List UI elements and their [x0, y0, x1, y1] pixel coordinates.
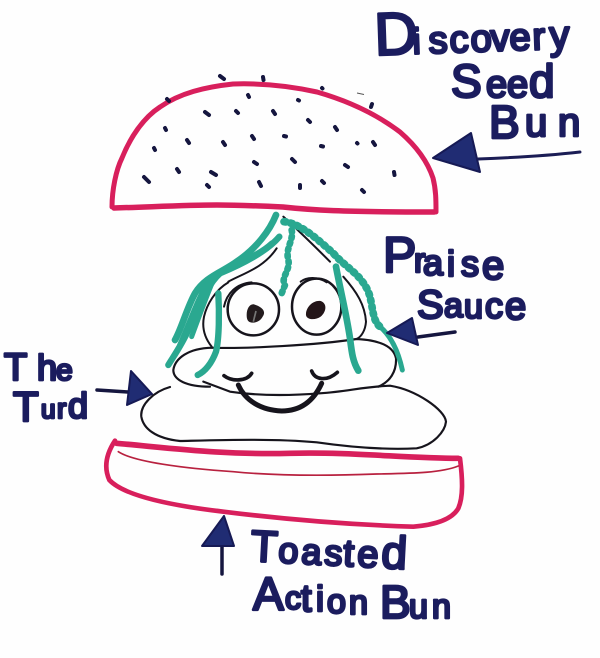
bun seeds	[144, 76, 394, 192]
bottom bun: toasted action bun	[106, 441, 462, 527]
turd outline	[141, 217, 446, 449]
label: Toasted Action Bun: T	[249, 522, 279, 572]
label: Toasted Action Bun: t	[342, 533, 356, 575]
label: Discovery Seed Bun	[373, 0, 580, 148]
label: Discovery Seed Bun: o	[470, 18, 492, 61]
label: Praise Sauce: P	[383, 227, 416, 283]
label: Toasted Action Bun: c	[285, 580, 301, 616]
label: Toasted Action Bun: A	[253, 568, 284, 620]
label: Discovery Seed Bun: i	[412, 21, 421, 62]
label: Discovery Seed Bun: D	[373, 0, 419, 68]
label: The Turd: T	[4, 347, 27, 389]
label: Discovery Seed Bun: v	[490, 17, 510, 60]
label: Discovery Seed Bun: c	[449, 19, 469, 61]
label: Toasted Action Bun: o	[277, 529, 300, 571]
label: Discovery Seed Bun: e	[486, 64, 507, 106]
label: Praise Sauce: i	[447, 243, 455, 284]
right eye	[292, 278, 341, 335]
label: The Turd: h	[37, 347, 57, 388]
label: Praise Sauce: r	[414, 242, 425, 280]
label: Toasted Action Bun: u	[409, 588, 428, 626]
arrow: the turd pointer	[97, 371, 152, 405]
label: Praise Sauce: a	[423, 242, 444, 283]
label: Toasted Action Bun: s	[323, 532, 344, 574]
label: Toasted Action Bun: n	[432, 588, 451, 626]
label: Toasted Action Bun	[249, 519, 451, 628]
label: Discovery Seed Bun: S	[451, 55, 482, 107]
label: Discovery Seed Bun: d	[529, 55, 555, 107]
label: The Turd: r	[57, 393, 66, 424]
label: Discovery Seed Bun: u	[525, 101, 547, 145]
label: Discovery Seed Bun: y	[549, 13, 570, 58]
label: The Turd	[4, 347, 88, 430]
label: Discovery Seed Bun: r	[532, 16, 546, 59]
arrow: praise sauce pointer	[387, 318, 455, 345]
label: Praise Sauce: S	[417, 283, 444, 327]
label: The Turd: T	[13, 383, 39, 430]
arrow: discovery seed bun pointer	[433, 133, 580, 172]
label: Praise Sauce: s	[461, 243, 479, 284]
smile	[224, 371, 337, 411]
label: Discovery Seed Bun: B	[489, 96, 520, 148]
arrow: toasted action bun pointer	[202, 516, 234, 574]
hair: green praise sauce	[168, 215, 402, 375]
label: Praise Sauce	[383, 227, 526, 328]
label: Toasted Action Bun: B	[380, 576, 411, 628]
label: Toasted Action Bun: t	[301, 578, 312, 620]
label: Praise Sauce: a	[444, 287, 463, 325]
label: The Turd: d	[68, 385, 88, 426]
label: Toasted Action Bun: i	[316, 578, 324, 619]
label: Toasted Action Bun: a	[300, 531, 324, 573]
label: Discovery Seed Bun: e	[509, 17, 531, 59]
label: The Turd: u	[41, 394, 55, 424]
label: The Turd: e	[56, 354, 73, 387]
label: Discovery Seed Bun: n	[558, 101, 580, 145]
label: Praise Sauce: e	[482, 244, 504, 288]
label: Praise Sauce: u	[464, 288, 483, 326]
label: Discovery Seed Bun: s	[428, 20, 448, 62]
top bun: discovery seed bun	[112, 84, 436, 212]
label: Toasted Action Bun: n	[349, 584, 368, 622]
label: Praise Sauce: e	[505, 286, 526, 328]
label: Toasted Action Bun: d	[380, 526, 409, 579]
the turd character	[141, 215, 446, 449]
left eye	[224, 282, 279, 335]
label: Toasted Action Bun: o	[327, 583, 346, 621]
label: Discovery Seed Bun: e	[507, 64, 528, 106]
label: Toasted Action Bun: e	[356, 534, 380, 577]
label: Praise Sauce: c	[485, 285, 503, 326]
